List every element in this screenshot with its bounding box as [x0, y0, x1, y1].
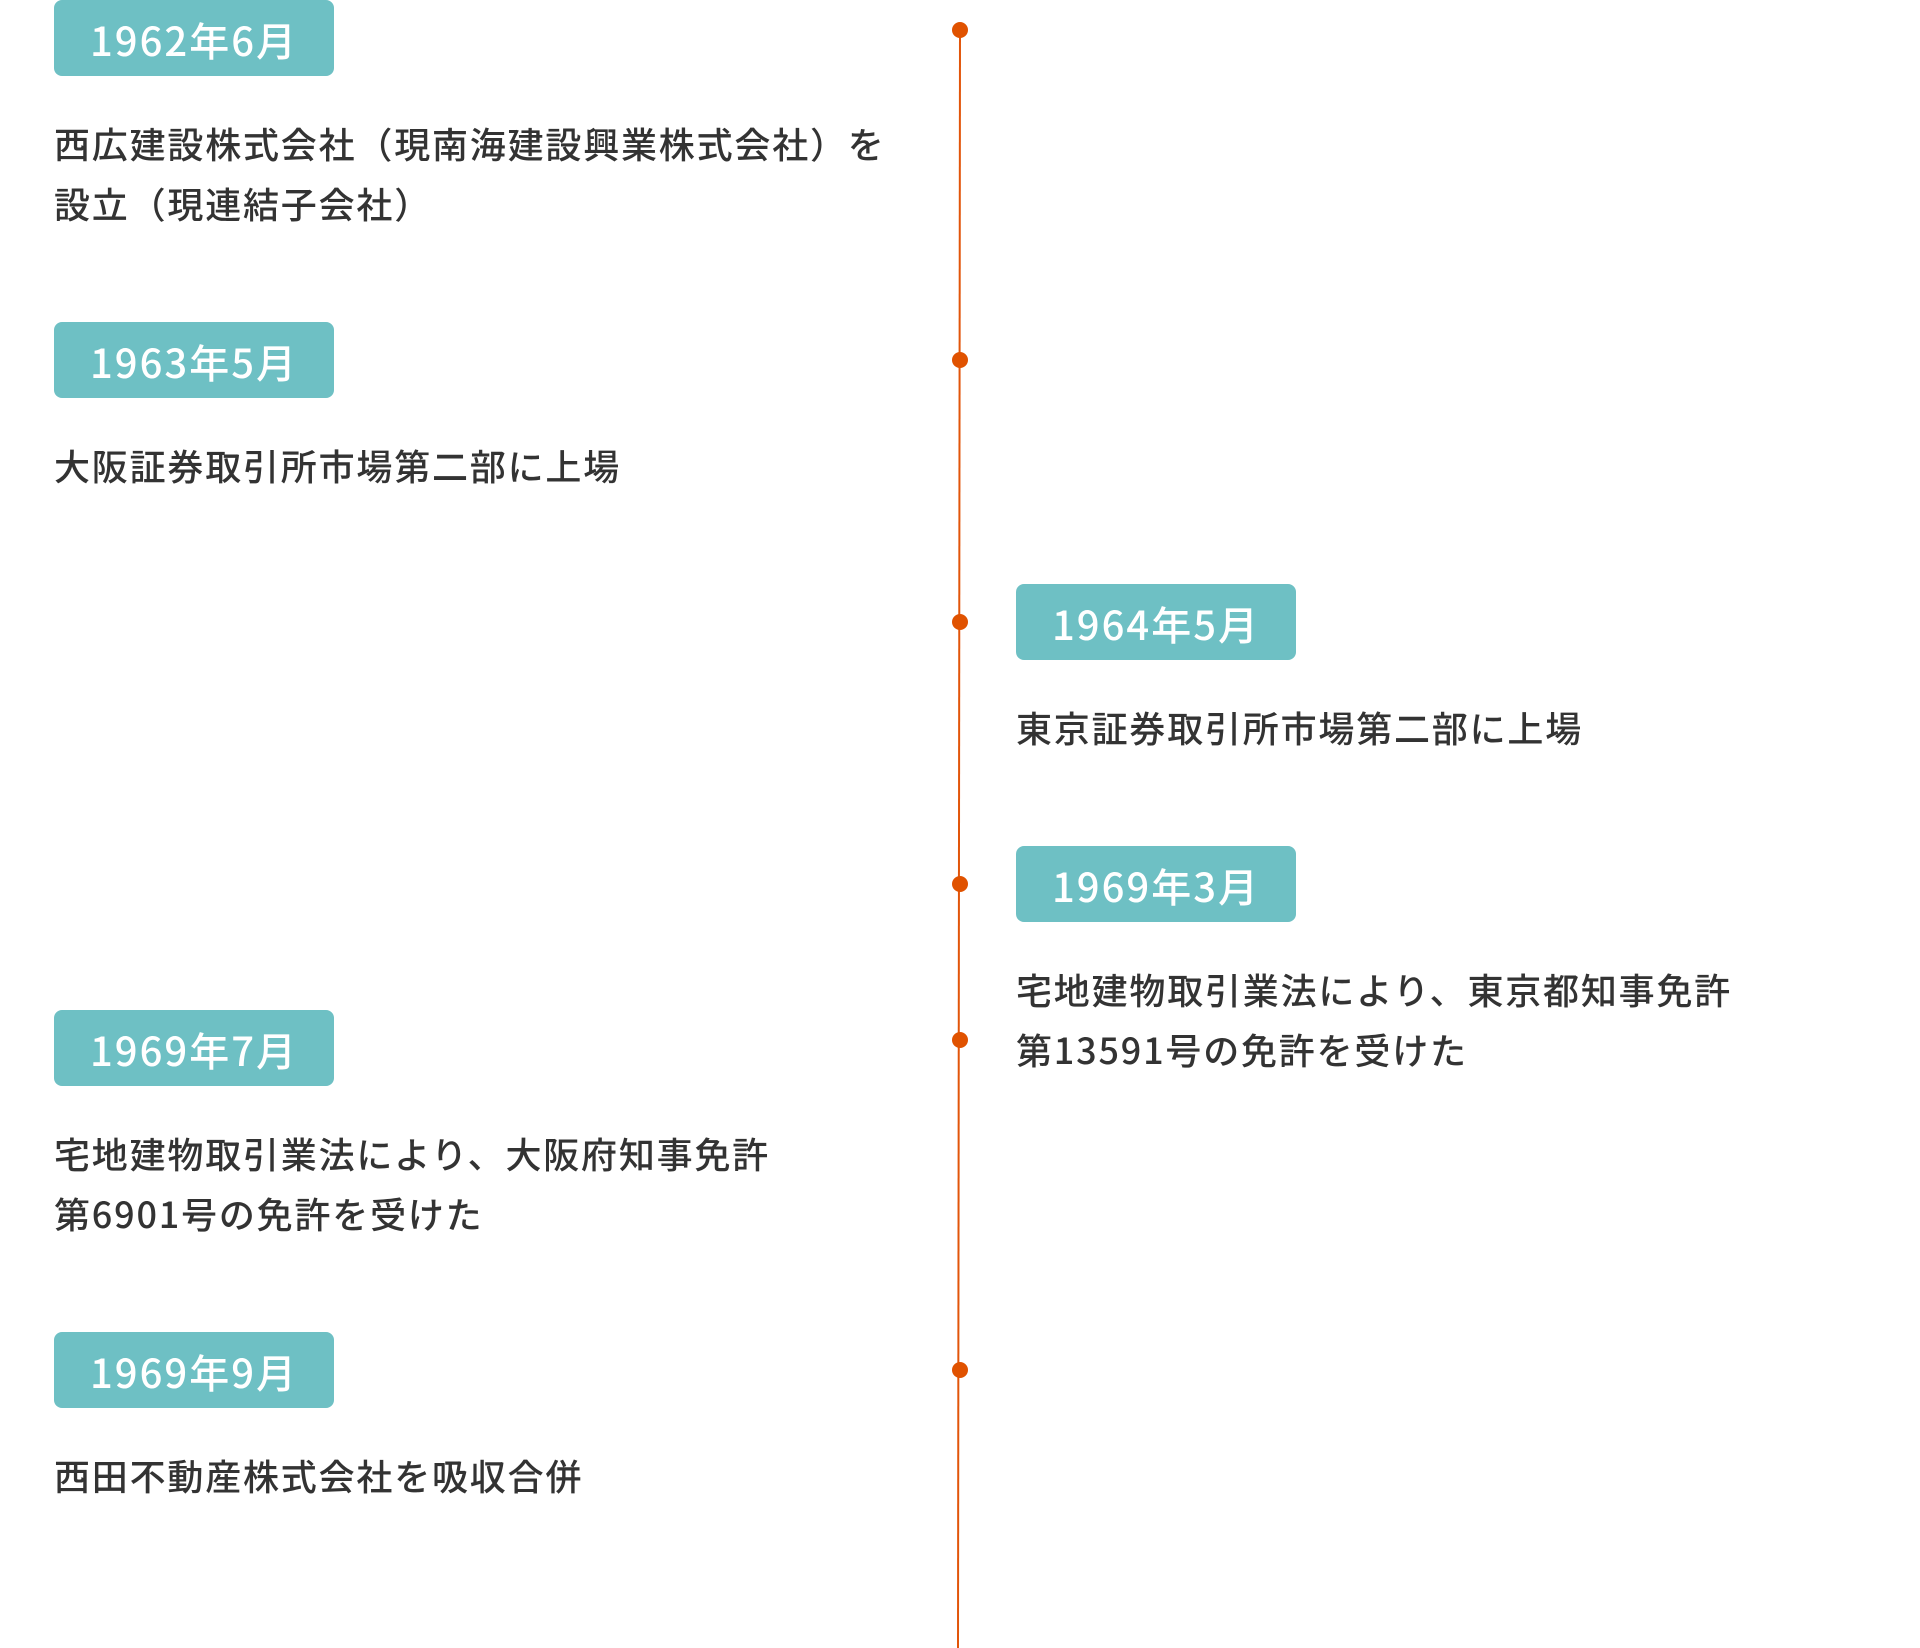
date badge — [54, 0, 334, 76]
date badge — [54, 1332, 334, 1408]
date badge: 1969年3月 — [1052, 856, 1260, 914]
entry: March 1969 — [1016, 846, 1732, 1075]
date badge — [1016, 846, 1296, 922]
description — [54, 117, 886, 229]
description: 東京証券取引所市場第二部に上場 — [1016, 701, 1583, 753]
description: 第13591号の免許を受けた — [1016, 1023, 1468, 1075]
description: 宅地建物取引業法により、大阪府知事免許 — [54, 1127, 770, 1179]
description — [54, 1127, 770, 1239]
date badge: 1964年5月 — [1052, 594, 1260, 652]
description: 西田不動産株式会社を吸収合併 — [54, 1449, 583, 1501]
date badge — [54, 1010, 334, 1086]
date badge — [54, 322, 334, 398]
entry: May 1964 — [1016, 584, 1583, 753]
description: 西広建設株式会社（現南海建設興業株式会社）を — [54, 117, 886, 169]
date badge: 1969年9月 — [90, 1342, 298, 1400]
description: 第6901号の免許を受けた — [54, 1187, 483, 1239]
date badge — [1016, 584, 1296, 660]
description: 宅地建物取引業法により、東京都知事免許 — [1016, 963, 1732, 1015]
description: 設立（現連結子会社） — [54, 177, 432, 229]
date badge: 1962年6月 — [90, 10, 298, 68]
entry: July 1969 — [54, 1010, 770, 1239]
entry: May 1963 — [54, 322, 621, 491]
description — [1016, 963, 1732, 1075]
date badge: 1969年7月 — [90, 1020, 298, 1078]
description: 大阪証券取引所市場第二部に上場 — [54, 439, 621, 491]
entry: June 1962 — [54, 0, 886, 229]
date badge: 1963年5月 — [90, 332, 298, 390]
entry: September 1969 — [54, 1332, 583, 1501]
